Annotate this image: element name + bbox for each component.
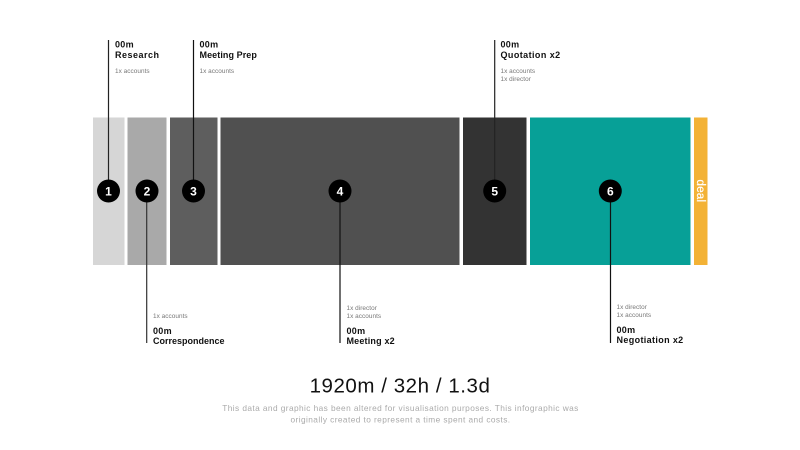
marker 6: negotiation x2: 6 xyxy=(607,184,614,198)
marker 6: negotiation x2: 1x director xyxy=(616,304,648,311)
marker 5: quotation x2: 5 xyxy=(491,184,498,198)
footnote xyxy=(222,403,579,424)
marker 6: negotiation x2 xyxy=(599,180,684,345)
marker 1: research: 1x accounts xyxy=(115,68,150,75)
marker 4: meeting x2: Meeting x2 xyxy=(346,336,395,346)
marker 4: meeting x2: 4 xyxy=(337,184,344,198)
marker 1: research: 1 xyxy=(105,184,112,198)
marker 3: meeting prep: 1x accounts xyxy=(200,68,234,75)
total time headline: 1920m / 32h / 1.3d xyxy=(310,374,490,398)
segment 2 bar xyxy=(128,118,166,265)
marker 4: meeting x2 xyxy=(328,180,395,346)
marker 3: meeting prep xyxy=(182,40,257,202)
marker 2: correspondence: 2 xyxy=(144,184,151,198)
segment 4 bar xyxy=(220,118,460,265)
marker 1: research: Research xyxy=(115,50,160,60)
deal bar xyxy=(694,118,708,265)
marker 5: quotation x2: 00m xyxy=(500,40,519,50)
deal bar: deal xyxy=(694,180,706,202)
marker 1: research: 00m xyxy=(115,40,134,50)
marker 2: correspondence xyxy=(136,180,225,346)
marker 2: correspondence: 1x accounts xyxy=(153,313,188,320)
footnote: This data and graphic has been altered for visualisation purposes. This infographic was xyxy=(222,403,579,413)
marker 1: research xyxy=(97,40,160,202)
marker 2: correspondence: Correspondence xyxy=(153,336,225,346)
segment 6 bar xyxy=(530,118,690,265)
marker 5: quotation x2: 1x director xyxy=(500,76,532,83)
marker 5: quotation x2: Quotation x2 xyxy=(500,50,561,60)
marker 3: meeting prep: 00m xyxy=(200,40,218,50)
segment 3 bar xyxy=(170,118,218,265)
marker 4: meeting x2: 00m xyxy=(346,326,365,336)
marker 6: negotiation x2: 1x accounts xyxy=(616,312,651,319)
marker 6: negotiation x2: 00m xyxy=(616,325,635,335)
marker 3: meeting prep: 3 xyxy=(190,184,197,198)
segment 1 bar xyxy=(93,118,124,265)
marker 6: negotiation x2: Negotiation x2 xyxy=(616,335,684,345)
marker 4: meeting x2: 1x director xyxy=(346,305,378,312)
marker 5: quotation x2: 1x accounts xyxy=(500,68,535,75)
footnote: originally created to represent a time spent and costs. xyxy=(290,414,511,424)
marker 4: meeting x2: 1x accounts xyxy=(346,313,381,320)
marker 3: meeting prep: Meeting Prep xyxy=(200,50,257,60)
segment 5 bar xyxy=(463,118,526,265)
marker 5: quotation x2 xyxy=(483,40,561,202)
marker 2: correspondence: 00m xyxy=(153,326,172,336)
